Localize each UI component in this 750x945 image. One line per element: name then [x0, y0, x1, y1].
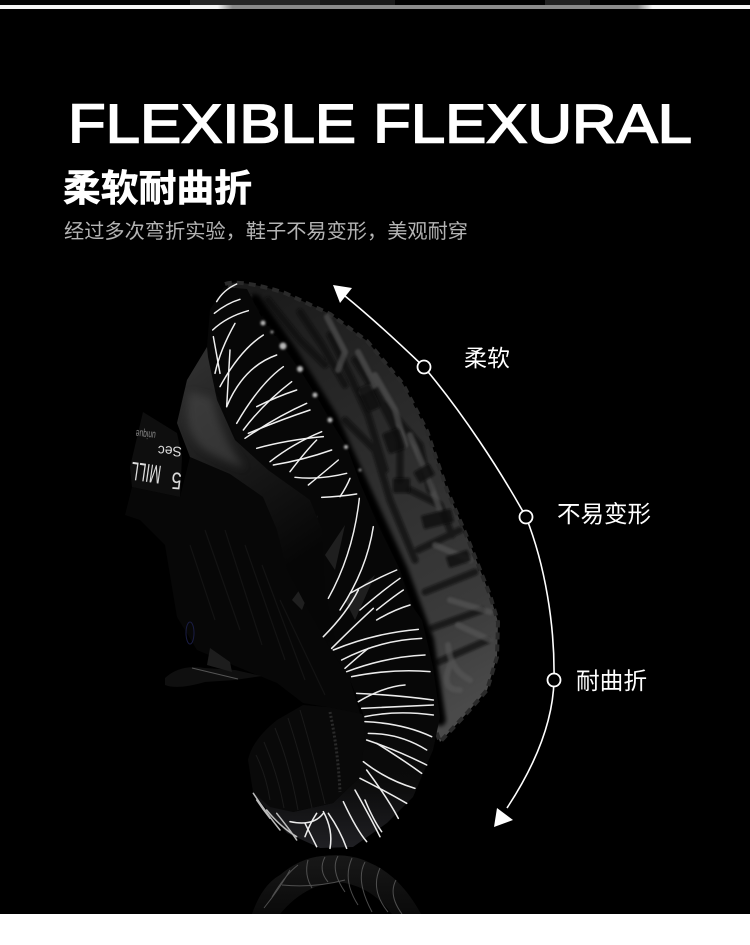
outer tread sole — [225, 283, 498, 742]
reflection of shoe — [252, 855, 421, 914]
curved arrow with markers — [333, 285, 560, 827]
label: bend resistant: 耐曲折 — [576, 668, 647, 694]
white lines lower section — [253, 590, 433, 848]
midsole panel — [177, 287, 440, 848]
bottom white strip — [0, 914, 750, 945]
tread studs — [260, 320, 361, 471]
tab lettering: Sec — [157, 443, 182, 460]
lace and eyelet — [165, 622, 262, 687]
marker 3 — [548, 674, 560, 686]
dark groove beside tooth line — [255, 300, 440, 720]
arrowhead top — [333, 285, 352, 303]
cup highlight — [187, 392, 245, 468]
tab lettering: unique — [135, 427, 156, 441]
ribbed toe cap — [248, 705, 365, 812]
subtitle: 柔软耐曲折 — [63, 168, 252, 209]
label: soft: 柔软 — [464, 345, 510, 371]
tab lettering — [129, 427, 182, 494]
title: FLEXIBLE FLEXURAL — [68, 92, 692, 154]
top image strip — [0, 0, 750, 9]
label: no deformation: 不易变形 — [557, 501, 651, 527]
heel cup rubber band — [177, 347, 335, 643]
tab lettering: MILL — [129, 456, 163, 490]
dark tread blocks — [357, 383, 471, 568]
arrowhead bottom — [494, 808, 513, 827]
midsole facets — [282, 497, 375, 620]
heel pull tab — [129, 412, 182, 497]
white lines upper section — [213, 284, 403, 610]
marker 1 — [418, 360, 430, 374]
tab lettering: 5 — [171, 466, 182, 494]
shoe upper knit — [125, 457, 362, 720]
tread lugs — [255, 300, 490, 720]
shoe — [125, 283, 498, 848]
marker 2 — [520, 510, 532, 524]
description: 经过多次弯折实验，鞋子不易变形，美观耐穿 — [64, 220, 468, 243]
